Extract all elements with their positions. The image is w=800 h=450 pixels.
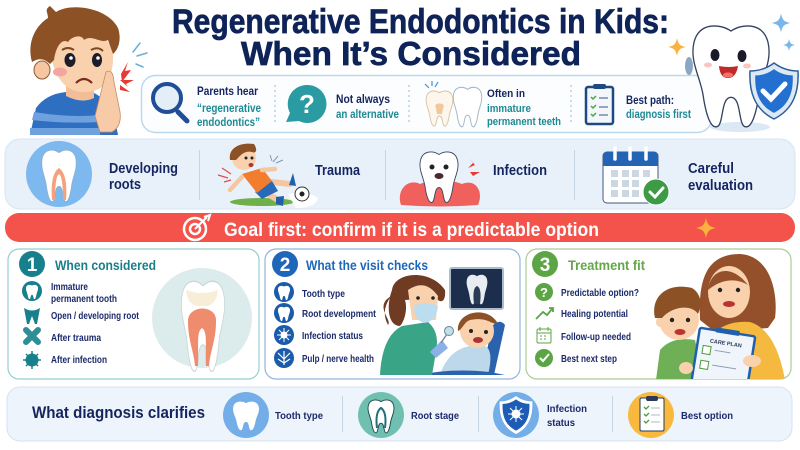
text: parents hear: “regenerative [197, 103, 261, 115]
icon: two teeth [425, 81, 482, 127]
text: root stage: Root stage [411, 410, 459, 422]
text: infection: Infection [493, 163, 547, 179]
text: developing roots: roots [109, 177, 141, 193]
text: infection status: Infection status [302, 330, 363, 342]
illustration: parent and child with care plan: CARE PLAN [709, 339, 742, 349]
text: developing roots: Developing [109, 161, 178, 177]
illustration: infected tooth with gum [400, 152, 480, 206]
heading: What diagnosis clarifies [32, 403, 205, 422]
text: often in: permanent teeth [487, 116, 561, 128]
icon: question: ? [540, 285, 548, 300]
text: not always: an alternative [336, 109, 399, 121]
text: not always [336, 94, 399, 121]
heading: Treatment fit [568, 257, 645, 273]
icon: tooth type [223, 392, 269, 438]
icon: best option clipboard [628, 392, 674, 438]
illustration: parent and child with care plan [654, 254, 785, 390]
icon: virus [23, 351, 41, 369]
text: tooth type: Tooth type [275, 410, 323, 422]
heading: When considered [55, 257, 156, 273]
panel: when considered [8, 249, 259, 379]
badge 3 [532, 251, 558, 277]
text: parents hear: endodontics” [197, 117, 260, 129]
icon: root stage [358, 392, 404, 438]
text: often in: immature [487, 103, 531, 115]
illustration: boy kicking ball [218, 144, 318, 208]
badge 2 [272, 251, 298, 277]
icon: calendar [537, 327, 551, 343]
icon: bandage [26, 330, 38, 342]
icon: tooth [22, 281, 42, 301]
banner: goal first [5, 213, 795, 242]
text: infection status: status [547, 417, 575, 429]
icon: infection shield [493, 392, 539, 438]
text: follow-up: Follow-up needed [561, 331, 631, 343]
text: pulp nerve health: Pulp / nerve health [302, 353, 374, 365]
text: careful evaluation [688, 161, 753, 194]
icon: developing root tooth [26, 141, 92, 207]
illustration: dentist and child [380, 275, 505, 375]
text: not always: Not always [336, 94, 390, 106]
title [172, 3, 669, 72]
icon: trend arrow [536, 308, 553, 319]
icon: target [184, 215, 210, 240]
icon: pulp nerve [274, 348, 294, 368]
text: parents hear: Parents hear [197, 86, 258, 98]
icon: question bubble [286, 85, 326, 123]
badge 1 [19, 251, 45, 277]
badge 1: 1 [27, 255, 38, 276]
badge 3: 3 [540, 255, 550, 276]
illustration: tooth mascot with shield [668, 14, 798, 132]
text: healing potential: Healing potential [561, 308, 628, 320]
icon: calendar with check [603, 148, 669, 205]
icon: question [535, 283, 553, 301]
icon: tooth type [274, 282, 294, 302]
icon: infection status [274, 325, 294, 345]
text: best next step: Best next step [561, 353, 617, 365]
illustration: tooth cross-section [152, 268, 252, 371]
icon: sparkle [696, 218, 716, 238]
text: parents hear [197, 86, 261, 129]
heading: What the visit checks [306, 257, 428, 273]
text: immature [51, 282, 117, 305]
illustration: x-ray display [450, 268, 503, 309]
text: immature: permanent tooth [51, 294, 117, 305]
text: developing roots [109, 161, 178, 193]
text: best option: Best option [681, 410, 733, 422]
title: Regenerative Endodontics in Kids: [172, 3, 669, 41]
text: open root: Open / developing root [51, 311, 140, 322]
illustration: worried boy [30, 6, 147, 135]
text: careful evaluation: Careful [688, 161, 734, 177]
icon: root [24, 308, 40, 324]
panel: summary strip [142, 76, 712, 132]
text: best path: diagnosis first [626, 109, 691, 121]
text: immature: Immature [51, 282, 88, 293]
text: careful evaluation: evaluation [688, 178, 753, 194]
text: infection status: Infection [547, 403, 587, 415]
icon: magnifier [153, 84, 187, 121]
text: infection status [547, 403, 587, 429]
panel: factors row [5, 139, 795, 209]
text: tooth type: Tooth type [302, 288, 345, 300]
text: trauma: Trauma [315, 163, 361, 179]
panel: what the visit checks [265, 249, 520, 379]
text: often in: Often in [487, 88, 525, 100]
text: goal headline: Goal first: confirm if it is a predictable option [224, 220, 599, 241]
text: best path: Best path: [626, 95, 674, 107]
icon: root development [274, 303, 294, 323]
panel: what diagnosis clarifies [7, 387, 792, 441]
icon: clipboard [586, 84, 613, 124]
text: best path [626, 95, 691, 121]
text: often in [487, 88, 561, 128]
icon: check [535, 349, 553, 367]
panel: treatment fit [526, 249, 791, 390]
text: after trauma: After trauma [51, 333, 101, 344]
text: predictable option: Predictable option? [561, 287, 639, 299]
icon: question bubble: ? [299, 89, 315, 119]
title: When It’s Considered [241, 35, 581, 72]
text: root development: Root development [302, 308, 376, 320]
badge 2: 2 [280, 255, 290, 276]
text: after infection: After infection [51, 355, 107, 366]
